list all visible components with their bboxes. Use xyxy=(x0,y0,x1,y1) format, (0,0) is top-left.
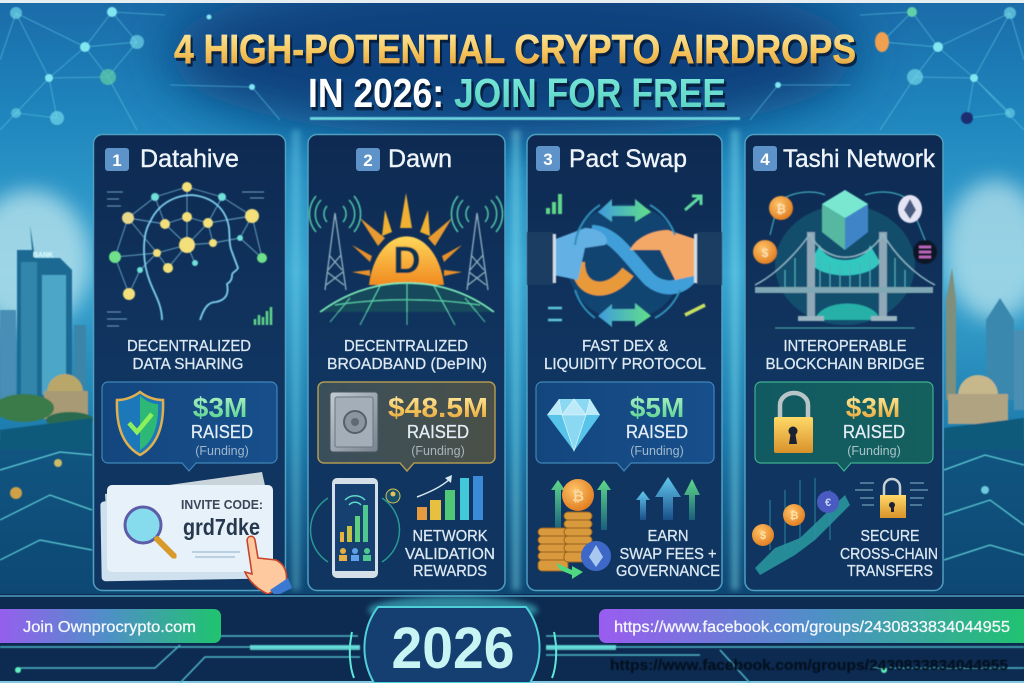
amount xyxy=(388,392,488,458)
description xyxy=(544,338,706,373)
amount: (Funding) xyxy=(411,444,465,458)
description: FAST DEX & xyxy=(582,338,668,355)
funding box xyxy=(755,382,933,471)
badge: 3 xyxy=(536,146,560,171)
icon: bridge with cube and coins: ₿ xyxy=(776,202,786,216)
amount: RAISED xyxy=(191,422,253,442)
amount xyxy=(191,392,253,458)
benefit text: EARN xyxy=(648,528,688,545)
badge: 4: 4 xyxy=(760,150,770,169)
invite text xyxy=(181,497,263,540)
description: DECENTRALIZED xyxy=(127,338,251,355)
benefit text: REWARDS xyxy=(413,563,487,580)
benefit text: NETWORK xyxy=(412,528,488,545)
button: Facebook group link: https://www.facebook.com/groups/2430833834044955 xyxy=(614,619,1010,636)
badge: 1 xyxy=(105,148,129,171)
icon: AI head with data network xyxy=(107,182,271,326)
amount: (Funding) xyxy=(630,444,684,458)
amount: RAISED xyxy=(843,422,905,442)
icon: infinity handshake xyxy=(527,194,722,327)
badge: 2 xyxy=(356,148,380,171)
icon: padlock xyxy=(774,393,813,453)
heading: Dawn: Dawn xyxy=(388,145,452,173)
description: DATA SHARING xyxy=(132,356,244,373)
benefit text: CROSS-CHAIN xyxy=(840,546,938,563)
footer band xyxy=(0,594,1024,683)
benefit text xyxy=(840,528,938,580)
heading: Tashi Network: Tashi Network xyxy=(783,145,935,173)
benefit text: TRANSFERS xyxy=(847,563,933,580)
amount: $5M xyxy=(630,392,684,423)
icon: sun, towers and globe xyxy=(309,193,503,325)
icon: bridge with cube and coins: $ xyxy=(762,246,769,260)
icon: coins and up arrows xyxy=(538,477,700,579)
description: BLOCKCHAIN BRIDGE xyxy=(766,356,924,373)
button: Join Ownprocrypto.com: Join Ownprocrypto.com xyxy=(23,619,196,636)
icon: cross-chain coins and lock: $ xyxy=(760,530,766,542)
benefit text: VALIDATION xyxy=(405,546,495,563)
funding box xyxy=(102,382,277,471)
description: DECENTRALIZED xyxy=(344,338,468,355)
icon: safe xyxy=(330,392,378,452)
amount xyxy=(626,392,688,458)
skyline: left: BANK xyxy=(33,252,53,259)
overprinted link text: https://www.facebook.com/groups/2430833834044955 xyxy=(610,657,1008,674)
description xyxy=(327,338,487,373)
panel: Tashi Network xyxy=(745,134,943,590)
amount xyxy=(843,392,905,458)
funding box xyxy=(318,382,495,471)
icon: phone with signal xyxy=(310,478,400,578)
skyline: left xyxy=(0,225,94,450)
amount: $3M xyxy=(193,392,247,423)
bar chart: growth xyxy=(417,475,483,520)
title: 4 HIGH-POTENTIAL CRYPTO AIRDROPS xyxy=(176,29,858,75)
icon: cross-chain coins and lock: € xyxy=(825,497,831,509)
heading: Datahive: Datahive xyxy=(140,145,239,173)
icon: shield xyxy=(117,392,163,455)
amount: (Funding) xyxy=(195,444,249,458)
button: Facebook group link xyxy=(599,609,1024,643)
amount: $48.5M xyxy=(388,392,488,423)
badge: 2: 2 xyxy=(363,151,373,170)
description xyxy=(127,338,251,373)
icon: cross-chain coins and lock xyxy=(752,478,928,575)
heading: Pact Swap: Pact Swap xyxy=(569,145,687,173)
title xyxy=(174,26,858,120)
invite code card xyxy=(100,472,292,596)
panel: Datahive xyxy=(94,134,292,596)
invite text: INVITE CODE: xyxy=(181,497,263,512)
amount: RAISED xyxy=(407,422,469,442)
description: BROADBAND (DePIN) xyxy=(327,356,487,373)
title: 4 HIGH-POTENTIAL CRYPTO AIRDROPS xyxy=(174,26,856,72)
panel: Pact Swap xyxy=(527,134,722,590)
badge: 2026: 2026 xyxy=(392,616,514,681)
network decoration: top right xyxy=(750,7,1024,130)
benefit text xyxy=(616,528,720,580)
badge: 1: 1 xyxy=(112,151,122,170)
funding box xyxy=(536,382,714,471)
icon: diamond xyxy=(547,399,600,451)
skyline: right xyxy=(944,268,1024,450)
icon: pointing hand xyxy=(245,536,292,596)
description: INTEROPERABLE xyxy=(784,338,906,355)
icon: sun, towers and globe: D xyxy=(393,240,421,282)
description: LIQUIDITY PROTOCOL xyxy=(544,356,706,373)
title: IN 2026: JOIN FOR FREE xyxy=(310,73,728,119)
button: Join Ownprocrypto.com xyxy=(0,609,221,643)
amount: RAISED xyxy=(626,422,688,442)
title: IN 2026: JOIN FOR FREE xyxy=(308,70,726,116)
icon: coins and up arrows: ₿ xyxy=(572,488,584,505)
benefit text: GOVERNANCE xyxy=(616,563,720,580)
network decoration: top left xyxy=(0,7,280,130)
badge: 2026 xyxy=(350,596,556,683)
icon: magnifier xyxy=(125,507,174,556)
benefit text: SWAP FEES + xyxy=(620,546,716,563)
badge: 3: 3 xyxy=(543,150,553,169)
glowing tech lines left and right xyxy=(0,452,1024,560)
amount: $3M xyxy=(846,392,900,423)
benefit text xyxy=(405,528,495,580)
amount: (Funding) xyxy=(847,444,901,458)
description xyxy=(766,338,924,373)
badge: 4 xyxy=(753,146,777,171)
invite text: grd7dke xyxy=(183,514,260,540)
panel: Dawn xyxy=(308,134,505,590)
benefit text: SECURE xyxy=(860,528,920,545)
icon: cross-chain coins and lock: ₿ xyxy=(790,510,799,522)
icon: bridge with cube and coins xyxy=(753,190,937,328)
